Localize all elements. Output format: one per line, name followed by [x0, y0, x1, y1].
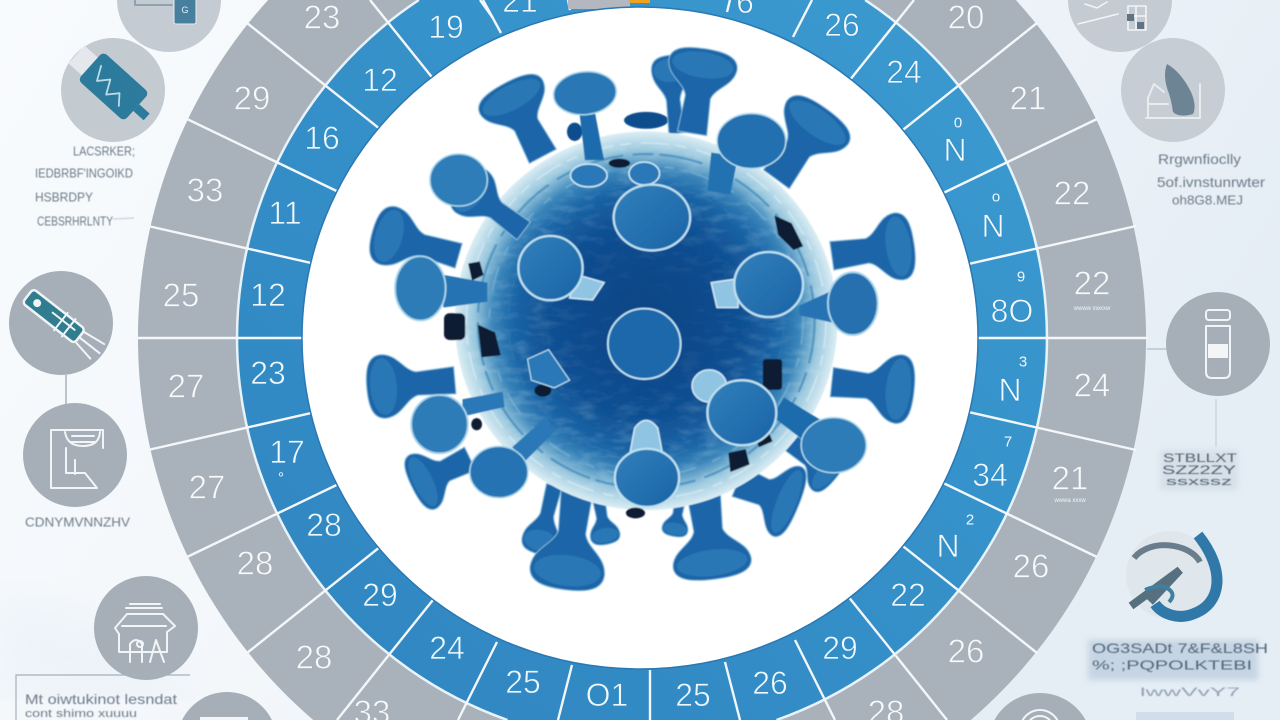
top orange marker: [629, 0, 650, 3]
blue ring numbers: 25: [675, 677, 711, 713]
grey ring numbers: 27: [168, 368, 204, 404]
icon: right top: [1068, 0, 1172, 52]
grey ring numbers: 28: [237, 544, 273, 582]
blue ring numbers: 34: [972, 457, 1008, 493]
label: lower right text: OG3SADt 7&F&L8SH: [1092, 640, 1268, 656]
virus sphere: [455, 131, 838, 510]
sphere dark core: [520, 183, 772, 443]
blue ring numbers: 28: [306, 507, 342, 543]
label: blurred block: ssxssz: [1166, 476, 1232, 488]
icon: bottom left partial: [182, 692, 272, 720]
icon: right vial: [1166, 292, 1270, 396]
blue ring numbers: 24: [886, 54, 922, 90]
blue ring numbers: 9: [1017, 268, 1025, 286]
bottom left tint: [0, 600, 190, 700]
segment dividers: [136, 0, 1148, 720]
label: blurred block: [1160, 450, 1238, 490]
front spikes on rim: [395, 69, 878, 498]
grey ring numbers: 33: [187, 172, 223, 208]
front sphere spikes: [518, 162, 803, 507]
blue ring numbers: 23: [250, 355, 286, 391]
grey ring numbers: 22: [1054, 174, 1090, 212]
white centre disc: [302, 7, 978, 669]
label: right upper text: oh8G8.MEJ: [1172, 192, 1243, 208]
label: lower right text: lwwVvY7: [1140, 685, 1241, 699]
label: right upper text: Rrgwnfioclly: [1158, 151, 1241, 167]
blue ring numbers: N: [998, 372, 1022, 408]
label: lower right text: %; ;PQPOLKTEBI: [1092, 658, 1252, 672]
icon: swirl: [1126, 531, 1217, 619]
label: right upper text: [1157, 151, 1265, 208]
blue ring numbers: 22: [890, 577, 926, 613]
blue ring numbers: 8O: [991, 293, 1033, 329]
label: left upper text: HSBRDPY: [35, 190, 93, 204]
top grey marker: [568, 0, 630, 9]
icon: left house: [94, 576, 198, 680]
connector: [1215, 399, 1217, 447]
dark specks: [444, 159, 803, 518]
blue ring: [237, 0, 1047, 720]
blue ring numbers: 16: [304, 120, 340, 156]
grey ring numbers: 27: [189, 468, 225, 506]
blue ring numbers: 26: [824, 7, 860, 43]
blue ring numbers: 7: [1004, 434, 1012, 450]
blue ring outline: [237, 0, 1047, 720]
callout box: bottom left: cont shimo xuuuu: [25, 708, 137, 720]
ring chart: [136, 0, 1148, 720]
blue ring numbers: N: [981, 208, 1005, 244]
grey ring numbers: 29: [234, 80, 270, 116]
blue ring numbers: 19: [428, 9, 464, 45]
rear spikes: [364, 43, 919, 594]
label: blurred block: SZZ2ZY: [1162, 463, 1236, 477]
grey ring numbers: 26: [948, 632, 984, 670]
blue ring numbers: 0: [954, 114, 962, 132]
blue ring numbers: 29: [822, 630, 858, 666]
sphere texture: [472, 146, 820, 486]
blue ring numbers: 26: [752, 665, 788, 701]
callout box: bottom left: [16, 675, 190, 720]
blue ring numbers: 12: [250, 277, 286, 313]
label: left upper text: [35, 144, 135, 228]
blue ring numbers: °: [278, 470, 284, 486]
blue ring numbers: 3: [1019, 354, 1027, 370]
icon: right upper: [1121, 38, 1225, 142]
grey ring numbers: 21: [1052, 460, 1088, 496]
grey ring numbers: 22: [1074, 264, 1110, 302]
blue ring numbers: 17: [269, 434, 305, 470]
blue ring numbers: 12: [362, 62, 398, 98]
connector: [65, 375, 67, 405]
connector: [1147, 348, 1166, 350]
icon: left top bottle: [117, 0, 221, 52]
grey ring numbers: 24: [1074, 366, 1110, 404]
label: left upper text: LACSRKER;: [73, 144, 135, 158]
grey ring numbers: 28: [296, 638, 332, 676]
grey ring numbers: 21: [1010, 80, 1046, 116]
icon: left syringe: [9, 271, 113, 375]
icon: left top bottle: G: [181, 5, 189, 15]
label: left lower text: CDNYMVNNZHV: [25, 514, 130, 530]
callout box: bottom left: Mt oiwtukinot lesndat: [25, 691, 177, 707]
outer grey ring: [138, 0, 1146, 720]
grey ring numbers: 25: [163, 276, 199, 314]
label: left upper text: CEBSRHRLNTY: [37, 214, 113, 228]
icon: bottom right ring: [994, 693, 1086, 720]
grey ring numbers: wwwa xxxw: [1053, 498, 1086, 504]
blue ring numbers: 24: [429, 630, 465, 666]
label: lower right text: [1088, 640, 1268, 720]
sphere rings: [466, 143, 826, 499]
blue ring numbers: [250, 0, 1033, 713]
icon: left tube: [61, 38, 165, 142]
grey ring numbers: [163, 0, 1111, 720]
blue ring numbers: N: [936, 528, 960, 564]
blue ring numbers: 2: [966, 512, 974, 528]
blue ring numbers: o: [992, 188, 1000, 206]
virus illustration: [364, 43, 919, 594]
blue ring numbers: 25: [505, 664, 541, 700]
grey ring numbers: 26: [1013, 548, 1049, 584]
icon: left monitor: [23, 403, 127, 507]
label: left upper text: IEDBRBF'INGOIKD: [35, 166, 133, 180]
blue ring numbers: 11: [268, 195, 302, 231]
label: blurred block: STBLLXT: [1163, 451, 1238, 465]
blue ring numbers: 29: [362, 577, 398, 613]
blue ring numbers: N: [943, 132, 967, 168]
label: right upper text: 5of.ivnstunrwter: [1157, 174, 1265, 190]
blue ring numbers: O1: [586, 677, 628, 713]
grey ring numbers: wwww xwxxw: [1073, 306, 1111, 312]
